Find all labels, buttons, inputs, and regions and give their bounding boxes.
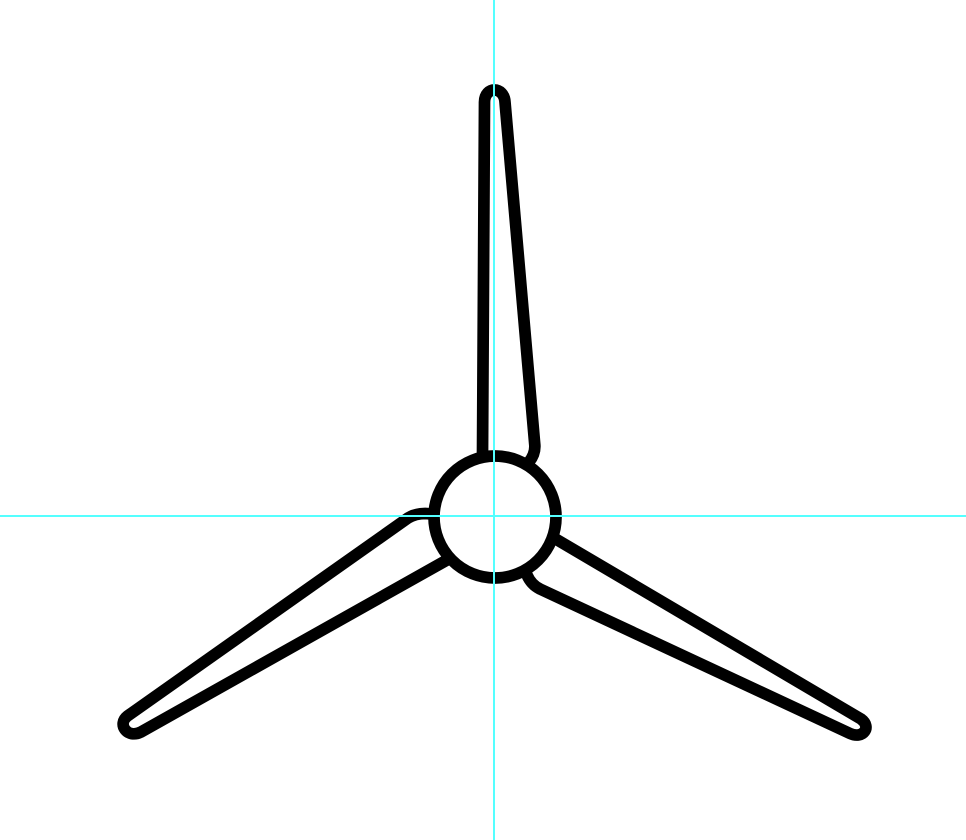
icon: turbine rotor	[123, 90, 866, 735]
vertical guide line	[493, 0, 495, 840]
top blade	[482, 90, 535, 462]
horizontal guide line	[0, 515, 966, 517]
hub	[434, 456, 556, 578]
lower right blade	[527, 538, 866, 735]
lower left blade	[123, 514, 447, 734]
